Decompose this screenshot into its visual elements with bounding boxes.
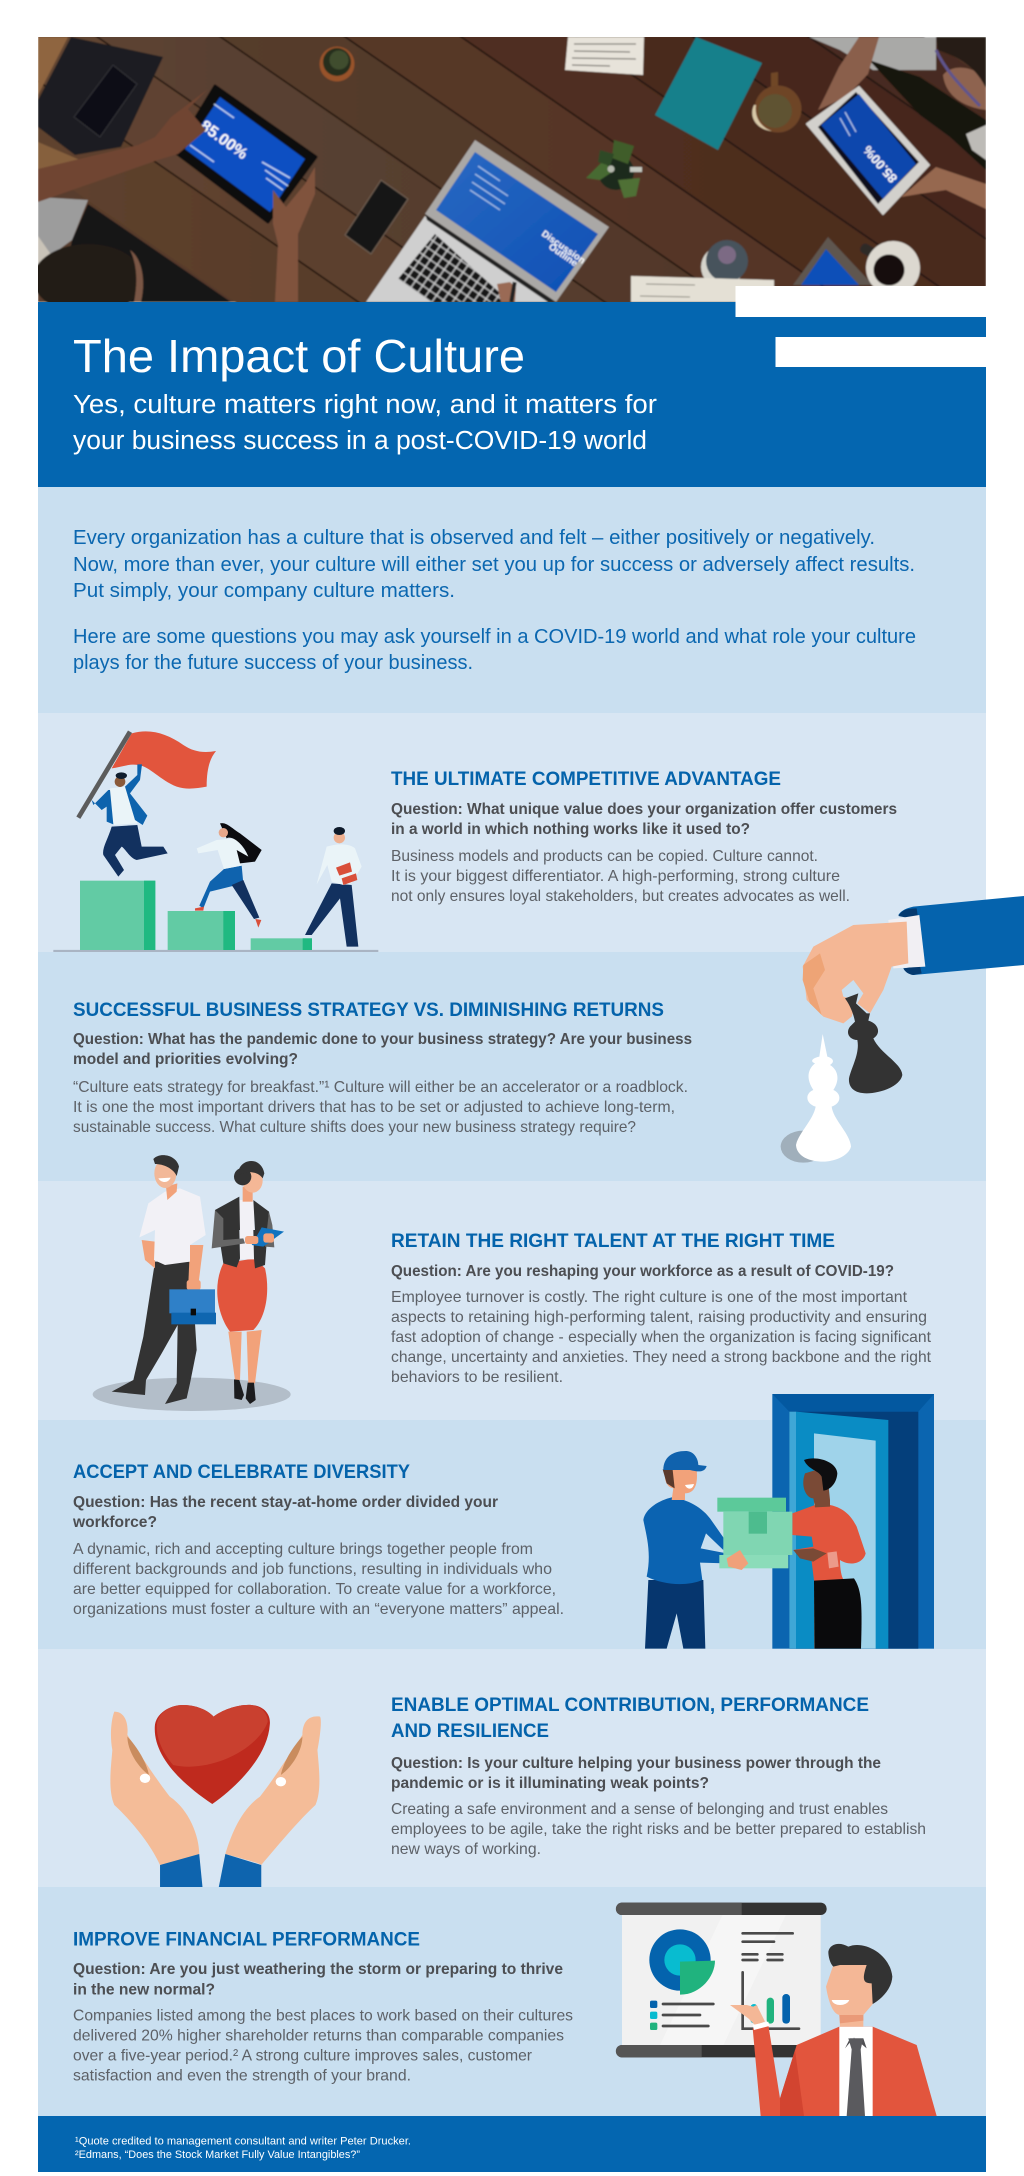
- laptop: Discussion: [539, 228, 587, 267]
- bottom tablet: [793, 237, 873, 285]
- body text: [391, 1289, 932, 1386]
- hands on left tablet: [38, 89, 315, 302]
- heading: [391, 1694, 869, 1742]
- header banner: [38, 302, 986, 487]
- laptop: [366, 140, 609, 302]
- photo: team around a wooden table: [38, 37, 986, 302]
- tablet left: [175, 86, 316, 222]
- body text: fast adoption of change - especially when the organization is facing significant: [391, 1329, 932, 1346]
- question: [391, 801, 897, 838]
- cactus pot: [320, 46, 354, 82]
- coffee cup: [860, 240, 922, 286]
- question: Question: Are you just weathering the storm or preparing to thrive: [73, 1961, 563, 1978]
- left table edge, floor and seated person: [33, 37, 231, 314]
- panel: introduction: [38, 487, 986, 713]
- panel: retain the right talent: [38, 1155, 986, 1420]
- heading: RETAIN THE RIGHT TALENT AT THE RIGHT TIME: [391, 1230, 835, 1252]
- body text: employees to be agile, take the right risks and be better prepared to establish: [391, 1821, 926, 1838]
- tablet right: 85.00%: [860, 142, 900, 186]
- body text: Employee turnover is costly. The right culture is one of the most important: [391, 1289, 908, 1306]
- intro paragraph one: [73, 527, 915, 602]
- footnote one: ¹Quote credited to management consultant and writer Peter Drucker.: [75, 2136, 411, 2148]
- panel: successful business strategy: [38, 896, 1024, 1181]
- icon: two professionals standing: [93, 1155, 291, 1411]
- heading: ACCEPT AND CELEBRATE DIVERSITY: [73, 1461, 410, 1483]
- body text: not only ensures loyal stakeholders, but creates advocates as well.: [391, 888, 850, 905]
- body text: satisfaction and even the strength of your brand.: [73, 2068, 411, 2084]
- heading: ENABLE OPTIMAL CONTRIBUTION, PERFORMANCE: [391, 1694, 869, 1716]
- body text: [73, 1079, 688, 1136]
- body text: behaviors to be resilient.: [391, 1369, 563, 1386]
- icon: hands holding a heart: [110, 1705, 321, 1887]
- body text: [73, 1541, 564, 1618]
- footer with footnotes: [38, 2116, 986, 2172]
- question: Question: Has the recent stay-at-home order divided your: [73, 1494, 498, 1511]
- question: Question: Are you reshaping your workforce as a result of COVID-19?: [391, 1263, 894, 1280]
- succulent: [700, 239, 749, 280]
- question: Question: Is your culture helping your business power through the: [391, 1755, 881, 1772]
- white corner bar top: [736, 286, 986, 317]
- body text: different backgrounds and job functions, resulting in individuals who: [73, 1561, 552, 1578]
- body text: It is your biggest differentiator. A high-performing, strong culture: [391, 868, 840, 885]
- question: workforce?: [72, 1514, 157, 1531]
- question: in the new normal?: [73, 1982, 215, 1998]
- body text: Business models and products can be copied. Culture cannot.: [391, 848, 818, 865]
- open note bottom: [631, 276, 774, 302]
- question: model and priorities evolving?: [73, 1051, 298, 1068]
- heading: THE ULTIMATE COMPETITIVE ADVANTAGE: [391, 768, 781, 790]
- body text: [73, 2008, 573, 2084]
- intro paragraph two: [73, 626, 916, 674]
- panel: accept and celebrate diversity: [38, 1394, 986, 1649]
- intro paragraph two: plays for the future success of your business.: [73, 652, 473, 674]
- laptop: Outline: [546, 241, 579, 269]
- intro paragraph one: Every organization has a culture that is observed and felt – either positively or negatively.: [73, 527, 875, 549]
- panel: enable optimal contribution: [38, 1649, 986, 1887]
- teal book: [655, 37, 762, 150]
- body text: delivered 20% higher shareholder returns than comparable companies: [73, 2028, 564, 2044]
- right side person: [809, 37, 986, 170]
- title: The Impact of Culture: [73, 330, 525, 382]
- icon: people climbing steps with a flag: [53, 731, 378, 951]
- body text: over a five-year period.² A strong culture improves sales, customer: [73, 2048, 533, 2064]
- hand at right tablet: [901, 167, 986, 209]
- phone on table: [345, 180, 408, 254]
- body text: aspects to retaining high-performing talent, raising productivity and ensuring: [391, 1309, 927, 1326]
- panel: the ultimate competitive advantage: [38, 713, 986, 952]
- heading: IMPROVE FINANCIAL PERFORMANCE: [73, 1928, 420, 1950]
- wood planks: [38, 37, 986, 302]
- body text: new ways of working.: [391, 1841, 541, 1858]
- body text: sustainable success. What culture shifts does your new business strategy require?: [73, 1119, 636, 1136]
- plant: [586, 140, 642, 198]
- body text: [391, 848, 850, 905]
- question: [73, 1961, 563, 1998]
- subtitle: [73, 391, 658, 455]
- icon: presenter with chart board: [616, 1903, 937, 2116]
- intro paragraph two: Here are some questions you may ask yourself in a COVID-19 world and what role your culture: [73, 626, 916, 648]
- icon: hand moving chess pieces: [781, 896, 1024, 1163]
- question: Question: What unique value does your organization offer customers: [391, 801, 897, 818]
- heading: SUCCESSFUL BUSINESS STRATEGY VS. DIMINISHING RETURNS: [73, 999, 664, 1021]
- question: pandemic or is it illuminating weak points?: [391, 1775, 709, 1792]
- tablet left: 85.00%: [197, 117, 251, 163]
- body text: [391, 1801, 926, 1858]
- body text: It is one the most important drivers that has to be set or adjusted to achieve long-term,: [73, 1099, 675, 1116]
- body text: change, uncertainty and anxieties. They need a strong backbone and the right: [391, 1349, 932, 1366]
- body text: “Culture eats strategy for breakfast.”¹ Culture will either be an accelerator or a roadblock.: [73, 1079, 688, 1096]
- question: in a world in which nothing works like it used to?: [391, 821, 750, 838]
- body text: organizations must foster a culture with an “everyone matters” appeal.: [73, 1601, 564, 1618]
- tablet right: [807, 87, 929, 214]
- subtitle: your business success in a post-COVID-19 world: [73, 427, 647, 455]
- brown mug: [752, 72, 802, 132]
- question: [73, 1031, 692, 1068]
- notepaper top: [565, 37, 644, 75]
- icon: parcel delivery at a door: [643, 1394, 934, 1649]
- body text: are better equipped for collaboration. To create value for a workforce,: [73, 1581, 556, 1598]
- white corner bar lower: [776, 337, 986, 367]
- panel: improve financial performance: [38, 1887, 986, 2116]
- question: [72, 1494, 498, 1531]
- body text: Creating a safe environment and a sense of belonging and trust enables: [391, 1801, 888, 1818]
- intro paragraph one: Now, more than ever, your culture will either set you up for success or adversely affect results.: [73, 554, 915, 576]
- black notebook and phone: [38, 37, 163, 155]
- body text: Companies listed among the best places to work based on their cultures: [73, 2008, 573, 2024]
- footnote two: ²Edmans, “Does the Stock Market Fully Value Intangibles?”: [75, 2149, 360, 2161]
- subtitle: Yes, culture matters right now, and it matters for: [73, 391, 658, 419]
- intro paragraph one: Put simply, your company culture matters.: [73, 580, 455, 602]
- body text: A dynamic, rich and accepting culture brings together people from: [73, 1541, 533, 1558]
- heading: AND RESILIENCE: [391, 1720, 549, 1742]
- question: [391, 1755, 881, 1792]
- question: Question: What has the pandemic done to your business strategy? Are your business: [73, 1031, 692, 1048]
